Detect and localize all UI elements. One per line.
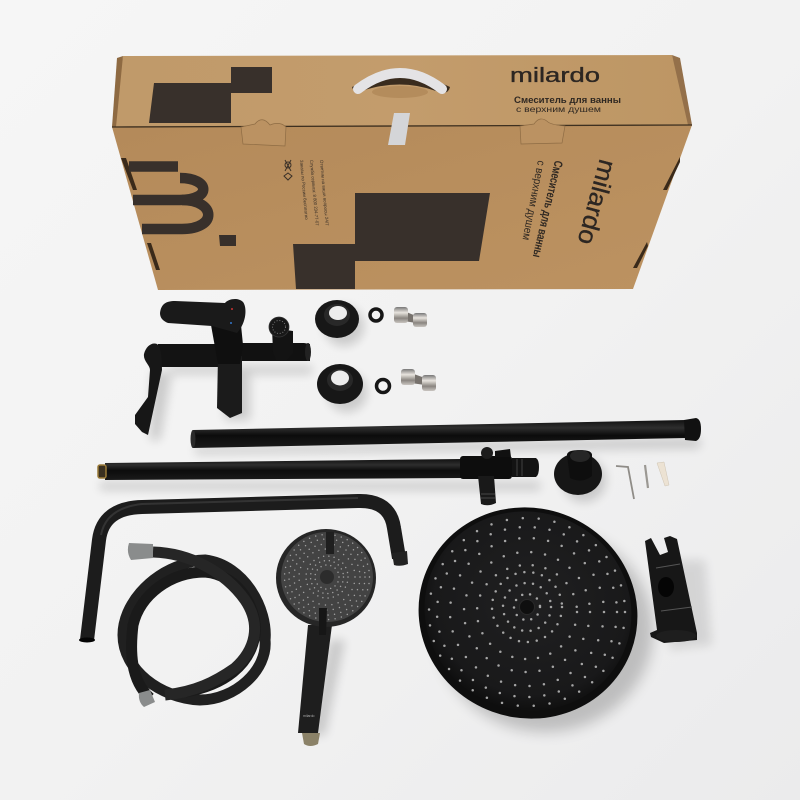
rain head shadow [437,528,653,732]
shadows under parts [100,306,700,735]
box lid [112,55,692,127]
shower arm [79,498,408,642]
mixer neck [211,325,243,364]
small service text: Ответим на ваши вопросы 24/7 [319,160,330,226]
shower holder [645,536,697,643]
lid graphic squares [149,67,272,123]
escutcheon top [315,300,359,338]
lid product name: с верхним душем [516,104,601,114]
mixer faucet [135,299,311,435]
diverter knob [272,328,293,360]
hand shower: milardo [303,714,315,718]
small service text: Служба сервиса: 8 800 234-77-67 [309,160,320,226]
hand shower [276,529,376,746]
panel: cardboard box [112,55,692,290]
hose connector bottom [139,690,155,707]
front graphic squares [293,193,490,289]
lid product name: Смеситель для ванны [514,95,621,105]
rain shower head [389,477,667,749]
lever handle [160,299,245,333]
spout [217,356,242,418]
small service text: Заказы по России бесплатно [299,160,309,220]
fold tabs [241,119,565,146]
certification marks [284,160,292,180]
handle [298,625,332,733]
logo on lid: milardo [510,65,600,87]
wall plug [657,462,669,486]
logo on front: milardo [572,156,621,248]
o-ring bottom [376,380,390,392]
brass connector [302,733,320,746]
holder shadow [660,560,712,650]
silver tape tab [388,113,410,145]
nipple top [394,307,427,327]
o-ring top [370,309,382,321]
front product name: с верхним душем [520,159,547,241]
head [276,529,376,627]
lower rod with diverter [98,447,539,505]
small service text [299,160,330,226]
front product name: Смеситель для ванны [530,159,566,259]
wall mount [554,450,602,495]
large m mark [129,166,208,229]
hose connector top [128,543,153,560]
hex key [616,466,634,499]
screw [645,465,648,488]
side slits [121,157,680,270]
handle slot and handle [352,73,450,98]
small square [219,235,236,246]
flexible hose [123,543,265,707]
diverter tee [460,456,512,479]
upper rod [190,418,701,448]
escutcheon bottom [317,364,363,404]
nipple bottom [401,369,436,391]
elbow lever [135,343,162,435]
box front face [112,125,692,290]
horizontal body [158,344,220,367]
lid product name [514,95,621,114]
